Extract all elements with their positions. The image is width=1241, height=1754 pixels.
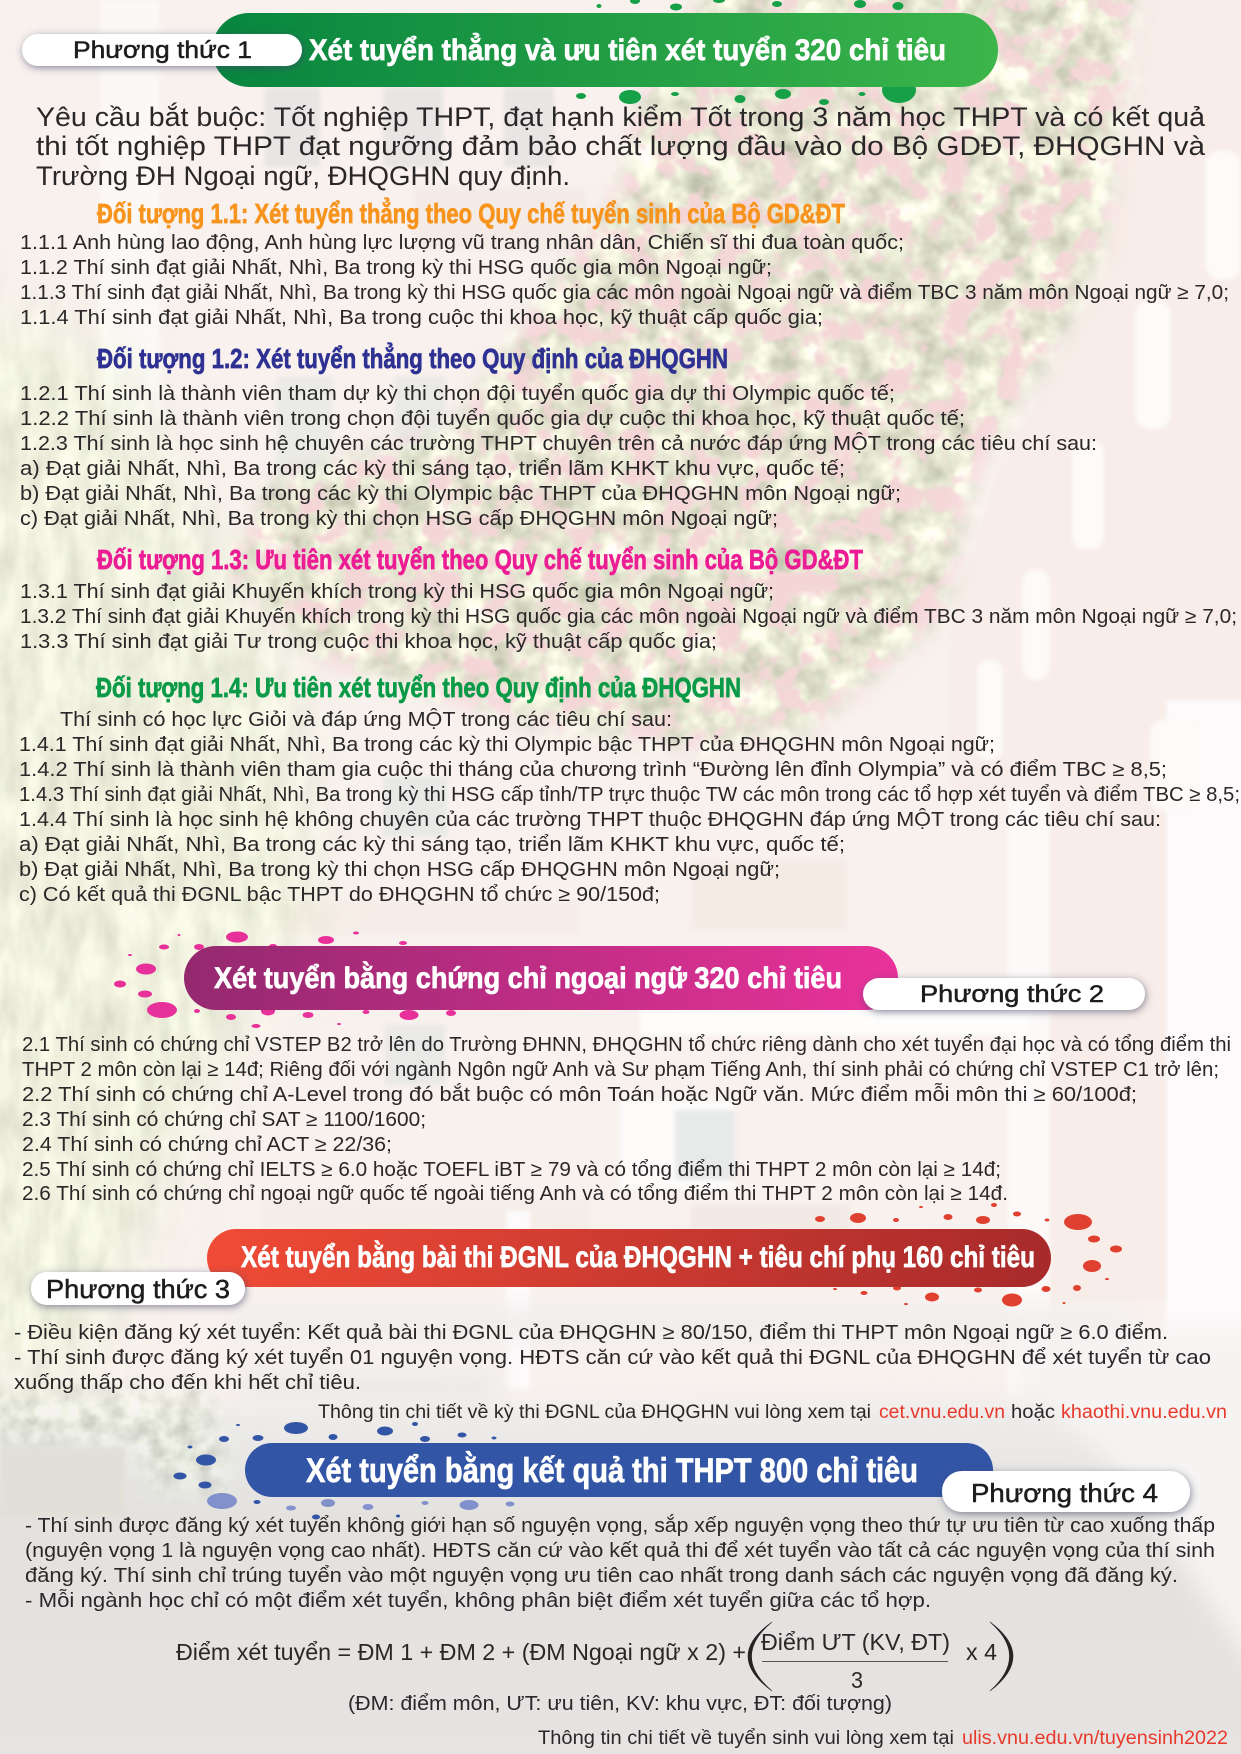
list 1.1: 1.1.3 Thí sinh đạt giải Nhất, Nhì, Ba trong kỳ thi HSG quốc gia các môn ngoài Ngoại ngữ và điểm TBC 3 năm môn Ngoại ngữ ≥ 7,0; — [20, 282, 1229, 304]
heading 1.2: Đối tượng 1.2: Xét tuyển thẳng theo Quy định của ĐHQGHN — [97, 342, 728, 374]
list 1.4 — [19, 708, 1240, 906]
text block: phương thức 2 criteria: 2.1 Thí sinh có chứng chỉ VSTEP B2 trở lên do Trường ĐHNN, ĐHQGHN tổ chức riêng dành cho xét tuyển đại học và có tổng điểm thi — [22, 1034, 1231, 1056]
list 1.4: a) Đạt giải Nhất, Nhì, Ba trong các kỳ thi sáng tạo, triển lãm KHKT khu vực, quốc tế; — [19, 834, 845, 856]
heading 1.3: Đối tượng 1.3: Ưu tiên xét tuyển theo Quy chế tuyển sinh của Bộ GD&ĐT — [97, 544, 863, 575]
text block: phương thức 3 criteria: xuống thấp cho đến khi hết chỉ tiêu. — [14, 1372, 361, 1394]
list 1.2: 1.2.3 Thí sinh là học sinh hệ chuyên các trường THPT chuyên trên cả nước đáp ứng MỘT trong các tiêu chí sau: — [20, 432, 1097, 455]
text block: phương thức 2 criteria: 2.4 Thí sinh có chứng chỉ ACT ≥ 22/36; — [22, 1134, 392, 1156]
list 1.4: 1.4.2 Thí sinh là thành viên tham gia cuộc thi tháng của chương trình “Đường lên đỉnh Olympia” và có điểm TBC ≥ 8,5; — [19, 759, 1167, 781]
list 1.2: a) Đạt giải Nhất, Nhì, Ba trong các kỳ thi sáng tạo, triển lãm KHKT khu vực, quốc tế; — [20, 458, 845, 480]
blue title bar — [245, 1443, 993, 1497]
list 1.3: 1.3.1 Thí sinh đạt giải Khuyến khích trong kỳ thi HSG quốc gia môn Ngoại ngữ; — [20, 581, 774, 603]
list 1.2 — [20, 383, 1097, 530]
pill label: Phương thức 1 — [73, 37, 252, 64]
title text: Xét tuyển bằng chứng chỉ ngoại ngữ 320 chỉ tiêu — [214, 961, 842, 995]
text block: phương thức 2 criteria — [22, 1034, 1231, 1205]
pill label: Phương thức 4 — [971, 1478, 1158, 1508]
text block: phương thức 3 criteria — [14, 1322, 1211, 1394]
list 1.2: b) Đạt giải Nhất, Nhì, Ba trong các kỳ thi Olympic bậc THPT của ĐHQGHN môn Ngoại ngữ; — [20, 483, 901, 505]
text block: phương thức 3 criteria: - Điều kiện đăng ký xét tuyển: Kết quả bài thi ĐGNL của ĐHQGHN ≥ 80/150, điểm thi THPT môn Ngoại ngữ ≥ 6.0 điểm. — [14, 1322, 1168, 1344]
formula: Điểm ƯT (KV, ĐT) — [761, 1629, 950, 1655]
text block: mandatory requirement — [36, 101, 1206, 191]
text block: phương thức 4 criteria: - Mỗi ngành học chỉ có một điểm xét tuyển, không phân biệt điểm xét tuyển giữa các tổ hợp. — [25, 1589, 931, 1612]
section: đối tượng 1.2 — [20, 342, 1097, 530]
text block: phương thức 4 criteria: (nguyện vọng 1 là nguyện vọng cao nhất). HĐTS căn cứ vào kết quả thi để xét tuyển vào tất cả các nguyện vọng của thí sinh — [25, 1540, 1215, 1562]
text block: phương thức 2 criteria: 2.6 Thí sinh có chứng chỉ ngoại ngữ quốc tế ngoài tiếng Anh và có tổng điểm thi THPT 2 môn còn lại ≥ 14đ. — [22, 1183, 1008, 1205]
note: ĐGNL links: khaothi.vnu.edu.vn — [1061, 1402, 1227, 1423]
panel: phương thức 3 header — [31, 1203, 1122, 1306]
pill label — [22, 34, 302, 66]
magenta splash dots — [114, 932, 456, 1028]
text block: phương thức 2 criteria: 2.3 Thí sinh có chứng chỉ SAT ≥ 1100/1600; — [22, 1109, 426, 1131]
title text: Xét tuyển thẳng và ưu tiên xét tuyển 320 chỉ tiêu — [309, 33, 946, 67]
title text: Xét tuyển bằng bài thi ĐGNL của ĐHQGHN + tiêu chí phụ 160 chỉ tiêu — [241, 1240, 1035, 1274]
list 1.1: 1.1.4 Thí sinh đạt giải Nhất, Nhì, Ba trong cuộc thi khoa học, kỹ thuật cấp quốc gia; — [20, 307, 823, 329]
list 1.3: 1.3.3 Thí sinh đạt giải Tư trong cuộc thi khoa học, kỹ thuật cấp quốc gia; — [20, 631, 717, 653]
pill label — [863, 978, 1145, 1010]
footer note: admissions link: ulis.vnu.edu.vn/tuyensinh2022 — [962, 1728, 1228, 1749]
text block: phương thức 4 criteria — [25, 1514, 1215, 1612]
text block: mandatory requirement: Trường ĐH Ngoại ngữ, ĐHQGHN quy định. — [36, 161, 570, 191]
list 1.4: b) Đạt giải Nhất, Nhì, Ba trong kỳ thi chọn HSG cấp ĐHQGHN môn Ngoại ngữ; — [19, 859, 780, 881]
note: ĐGNL links: hoặc — [1011, 1402, 1055, 1423]
formula legend: (ĐM: điểm môn, ƯT: ưu tiên, KV: khu vực, ĐT: đối tượng) — [348, 1693, 892, 1715]
list 1.1: 1.1.2 Thí sinh đạt giải Nhất, Nhì, Ba trong kỳ thi HSG quốc gia môn Ngoại ngữ; — [20, 257, 772, 279]
text block: phương thức 3 criteria: - Thí sinh được đăng ký xét tuyển 01 nguyện vọng. HĐTS căn cứ vào kết quả thi ĐGNL của ĐHQGHN để xét tuyển từ cao — [14, 1347, 1211, 1369]
formula: Điểm xét tuyển = ĐM 1 + ĐM 2 + (ĐM Ngoại ngữ x 2) + — [176, 1639, 746, 1665]
footer note: admissions link: Thông tin chi tiết về tuyển sinh vui lòng xem tại — [538, 1728, 954, 1749]
list 1.4: 1.4.4 Thí sinh là học sinh hệ không chuyên của các trường THPT thuộc ĐHQGHN đáp ứng MỘT trong các tiêu chí sau: — [19, 808, 1161, 831]
text block: phương thức 4 criteria: - Thí sinh được đăng ký xét tuyển không giới hạn số nguyện vọng, sắp xếp nguyện vọng theo thứ tự ưu tiên từ cao xuống thấp — [25, 1514, 1215, 1537]
formula: 3 — [851, 1667, 863, 1693]
list 1.4: 1.4.1 Thí sinh đạt giải Nhất, Nhì, Ba trong các kỳ thi Olympic bậc THPT của ĐHQGHN môn Ngoại ngữ; — [19, 734, 995, 756]
list 1.2: c) Đạt giải Nhất, Nhì, Ba trong kỳ thi chọn HSG cấp ĐHQGHN môn Ngoại ngữ; — [20, 508, 778, 530]
section: đối tượng 1.3 — [20, 544, 1237, 653]
text block: mandatory requirement: Yêu cầu bắt buộc: Tốt nghiệp THPT, đạt hạnh kiểm Tốt trong 3 năm học THPT và có kết quả — [36, 101, 1206, 132]
text block: phương thức 2 criteria: 2.5 Thí sinh có chứng chỉ IELTS ≥ 6.0 hoặc TOEFL iBT ≥ 79 và có tổng điểm thi THPT 2 môn còn lại ≥ 14đ; — [22, 1159, 1001, 1181]
note: ĐGNL links — [318, 1402, 1227, 1423]
list 1.4: c) Có kết quả thi ĐGNL bậc THPT do ĐHQGHN tổ chức ≥ 90/150đ; — [19, 884, 660, 906]
list 1.4: Thí sinh có học lực Giỏi và đáp ứng MỘT trong các tiêu chí sau: — [60, 708, 672, 731]
list 1.3 — [20, 581, 1237, 653]
list 1.1 — [20, 232, 1229, 329]
text block: phương thức 2 criteria: 2.2 Thí sinh có chứng chỉ A-Level trong đó bắt buộc có môn Toán hoặc Ngữ văn. Mức điểm mỗi môn thi ≥ 60/100đ; — [22, 1083, 1137, 1106]
panel: phương thức 1 header — [22, 0, 998, 105]
pill label: Phương thức 3 — [46, 1274, 230, 1304]
section: đối tượng 1.4 — [19, 672, 1240, 906]
text block: mandatory requirement: thi tốt nghiệp THPT đạt ngưỡng đảm bảo chất lượng đầu vào do Bộ GDĐT, ĐHQGHN và — [36, 131, 1206, 161]
panel: phương thức 2 header — [114, 932, 1145, 1028]
pill label — [942, 1471, 1190, 1512]
section: đối tượng 1.1 — [20, 197, 1229, 329]
panel: phương thức 4 header — [174, 1422, 1190, 1520]
heading 1.4: Đối tượng 1.4: Ưu tiên xét tuyển theo Quy định của ĐHQGHN — [96, 672, 741, 703]
green title bar — [212, 13, 998, 87]
list 1.2: 1.2.1 Thí sinh là thành viên tham dự kỳ thi chọn đội tuyển quốc gia dự thi Olympic quốc tế; — [20, 383, 895, 405]
heading 1.1: Đối tượng 1.1: Xét tuyển thẳng theo Quy chế tuyển sinh của Bộ GD&ĐT — [97, 197, 845, 229]
list 1.2: 1.2.2 Thí sinh là thành viên trong chọn đội tuyển quốc gia dự cuộc thi khoa học, kỹ thuật quốc tế; — [20, 408, 965, 430]
blue splash dots — [174, 1422, 514, 1520]
green splash dots — [576, 0, 916, 105]
list 1.3: 1.3.2 Thí sinh đạt giải Khuyến khích trong kỳ thi HSG quốc gia các môn ngoài Ngoại ngữ và điểm TBC 3 năm môn Ngoại ngữ ≥ 7,0; — [20, 606, 1237, 628]
list 1.4: 1.4.3 Thí sinh đạt giải Nhất, Nhì, Ba trong kỳ thi HSG cấp tỉnh/TP trực thuộc TW các môn trong các tổ hợp xét tuyển và điểm TBC ≥ 8,5; — [19, 784, 1240, 806]
note: ĐGNL links: cet.vnu.edu.vn — [879, 1402, 1005, 1423]
formula — [176, 1622, 1013, 1693]
text block: phương thức 2 criteria: THPT 2 môn còn lại ≥ 14đ; Riêng đối với ngành Ngôn ngữ Anh và Sư phạm Tiếng Anh, thí sinh phải có chứng chỉ VSTEP C1 trở lên; — [22, 1059, 1219, 1081]
magenta title bar — [184, 946, 898, 1010]
footer note: admissions link — [538, 1728, 1228, 1749]
title text: Xét tuyển bằng kết quả thi THPT 800 chỉ tiêu — [306, 1452, 918, 1490]
red splash dots — [815, 1203, 1122, 1306]
red title bar — [207, 1229, 1051, 1287]
formula: x 4 — [966, 1639, 997, 1665]
text block: phương thức 4 criteria: đăng ký. Thí sinh chỉ trúng tuyển vào một nguyện vọng ưu tiên cao nhất trong danh sách các nguyện vọng đã đăng ký. — [25, 1565, 1178, 1587]
list 1.1: 1.1.1 Anh hùng lao động, Anh hùng lực lượng vũ trang nhân dân, Chiến sĩ thi đua toàn quốc; — [20, 232, 904, 254]
pill label: Phương thức 2 — [920, 981, 1104, 1008]
note: ĐGNL links: Thông tin chi tiết về kỳ thi ĐGNL của ĐHQGHN vui lòng xem tại — [318, 1402, 871, 1423]
